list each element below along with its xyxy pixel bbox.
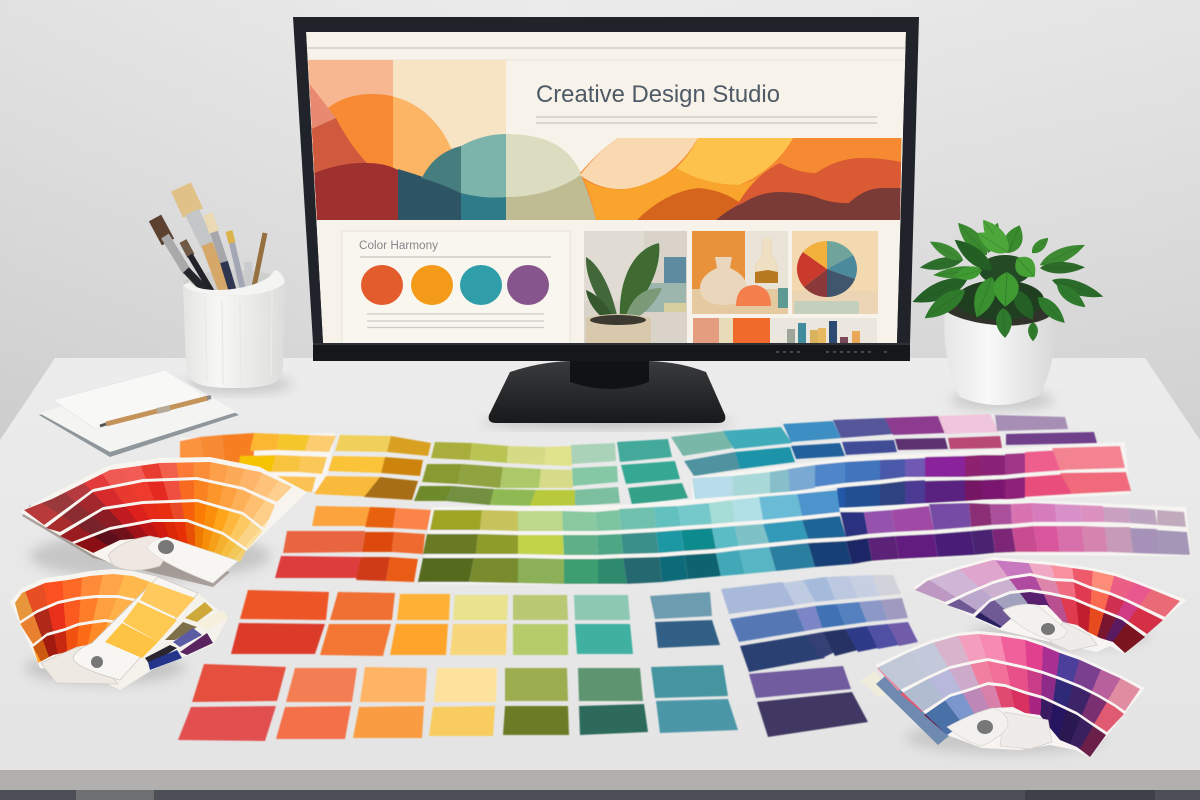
icon: brushes [155,187,265,292]
swatch cards: third row [231,590,720,656]
swatch fan: lilac pink violet [860,631,1145,757]
monitor stand [482,361,732,428]
panel: color harmony [342,231,570,347]
swatch fan: pink and red [914,557,1186,653]
title rule lines [536,117,877,123]
photo: plant [584,231,687,343]
desk surface [0,358,1200,800]
bottom strip with bars [693,318,877,343]
swatch wave: bottom row [418,488,1191,585]
fan card stack [1050,622,1097,651]
swatch wave: top row [180,414,1097,506]
wall background [0,0,1200,440]
potted plant [909,215,1105,409]
fan colour rows [24,462,292,562]
swatch group: blues [721,575,918,672]
fan colour rows [15,574,150,663]
notebook with pencil [39,370,239,457]
fan card stack scallops [108,536,175,570]
fan back cards dark [100,593,228,690]
fan handle with hole [947,708,1008,746]
monitor chin with buttons [313,343,910,361]
swatch fan: small orange [10,569,228,690]
fan card stack [1000,712,1052,749]
swatch wave: middle row [692,442,1131,508]
screen [305,32,906,347]
icon: leaves [909,215,1105,341]
fan handle with hole [1003,604,1067,640]
monitor bezel [293,17,919,343]
brush cup with paint brushes [155,187,292,393]
monitor [293,17,919,361]
swatch cards: fourth row [178,664,868,741]
title: Creative Design Studio [536,81,780,108]
icon: pencil [100,397,211,426]
photo: vases [692,231,788,314]
fan top card with hole [73,577,198,680]
icon: pot [944,310,1056,405]
colour circles [361,265,549,305]
hero banner artwork [305,60,905,220]
fan handle with hole [147,537,238,583]
fan colour rows [877,634,1140,757]
fan card stack [41,647,118,684]
fan back card [860,672,950,745]
photo: pie chart [792,231,878,314]
heading: color harmony: Color Harmony [359,240,438,252]
swatch group: red orange [275,506,431,582]
swatch fan: large red to yellow [20,457,307,587]
fan colour rows [915,560,1180,653]
